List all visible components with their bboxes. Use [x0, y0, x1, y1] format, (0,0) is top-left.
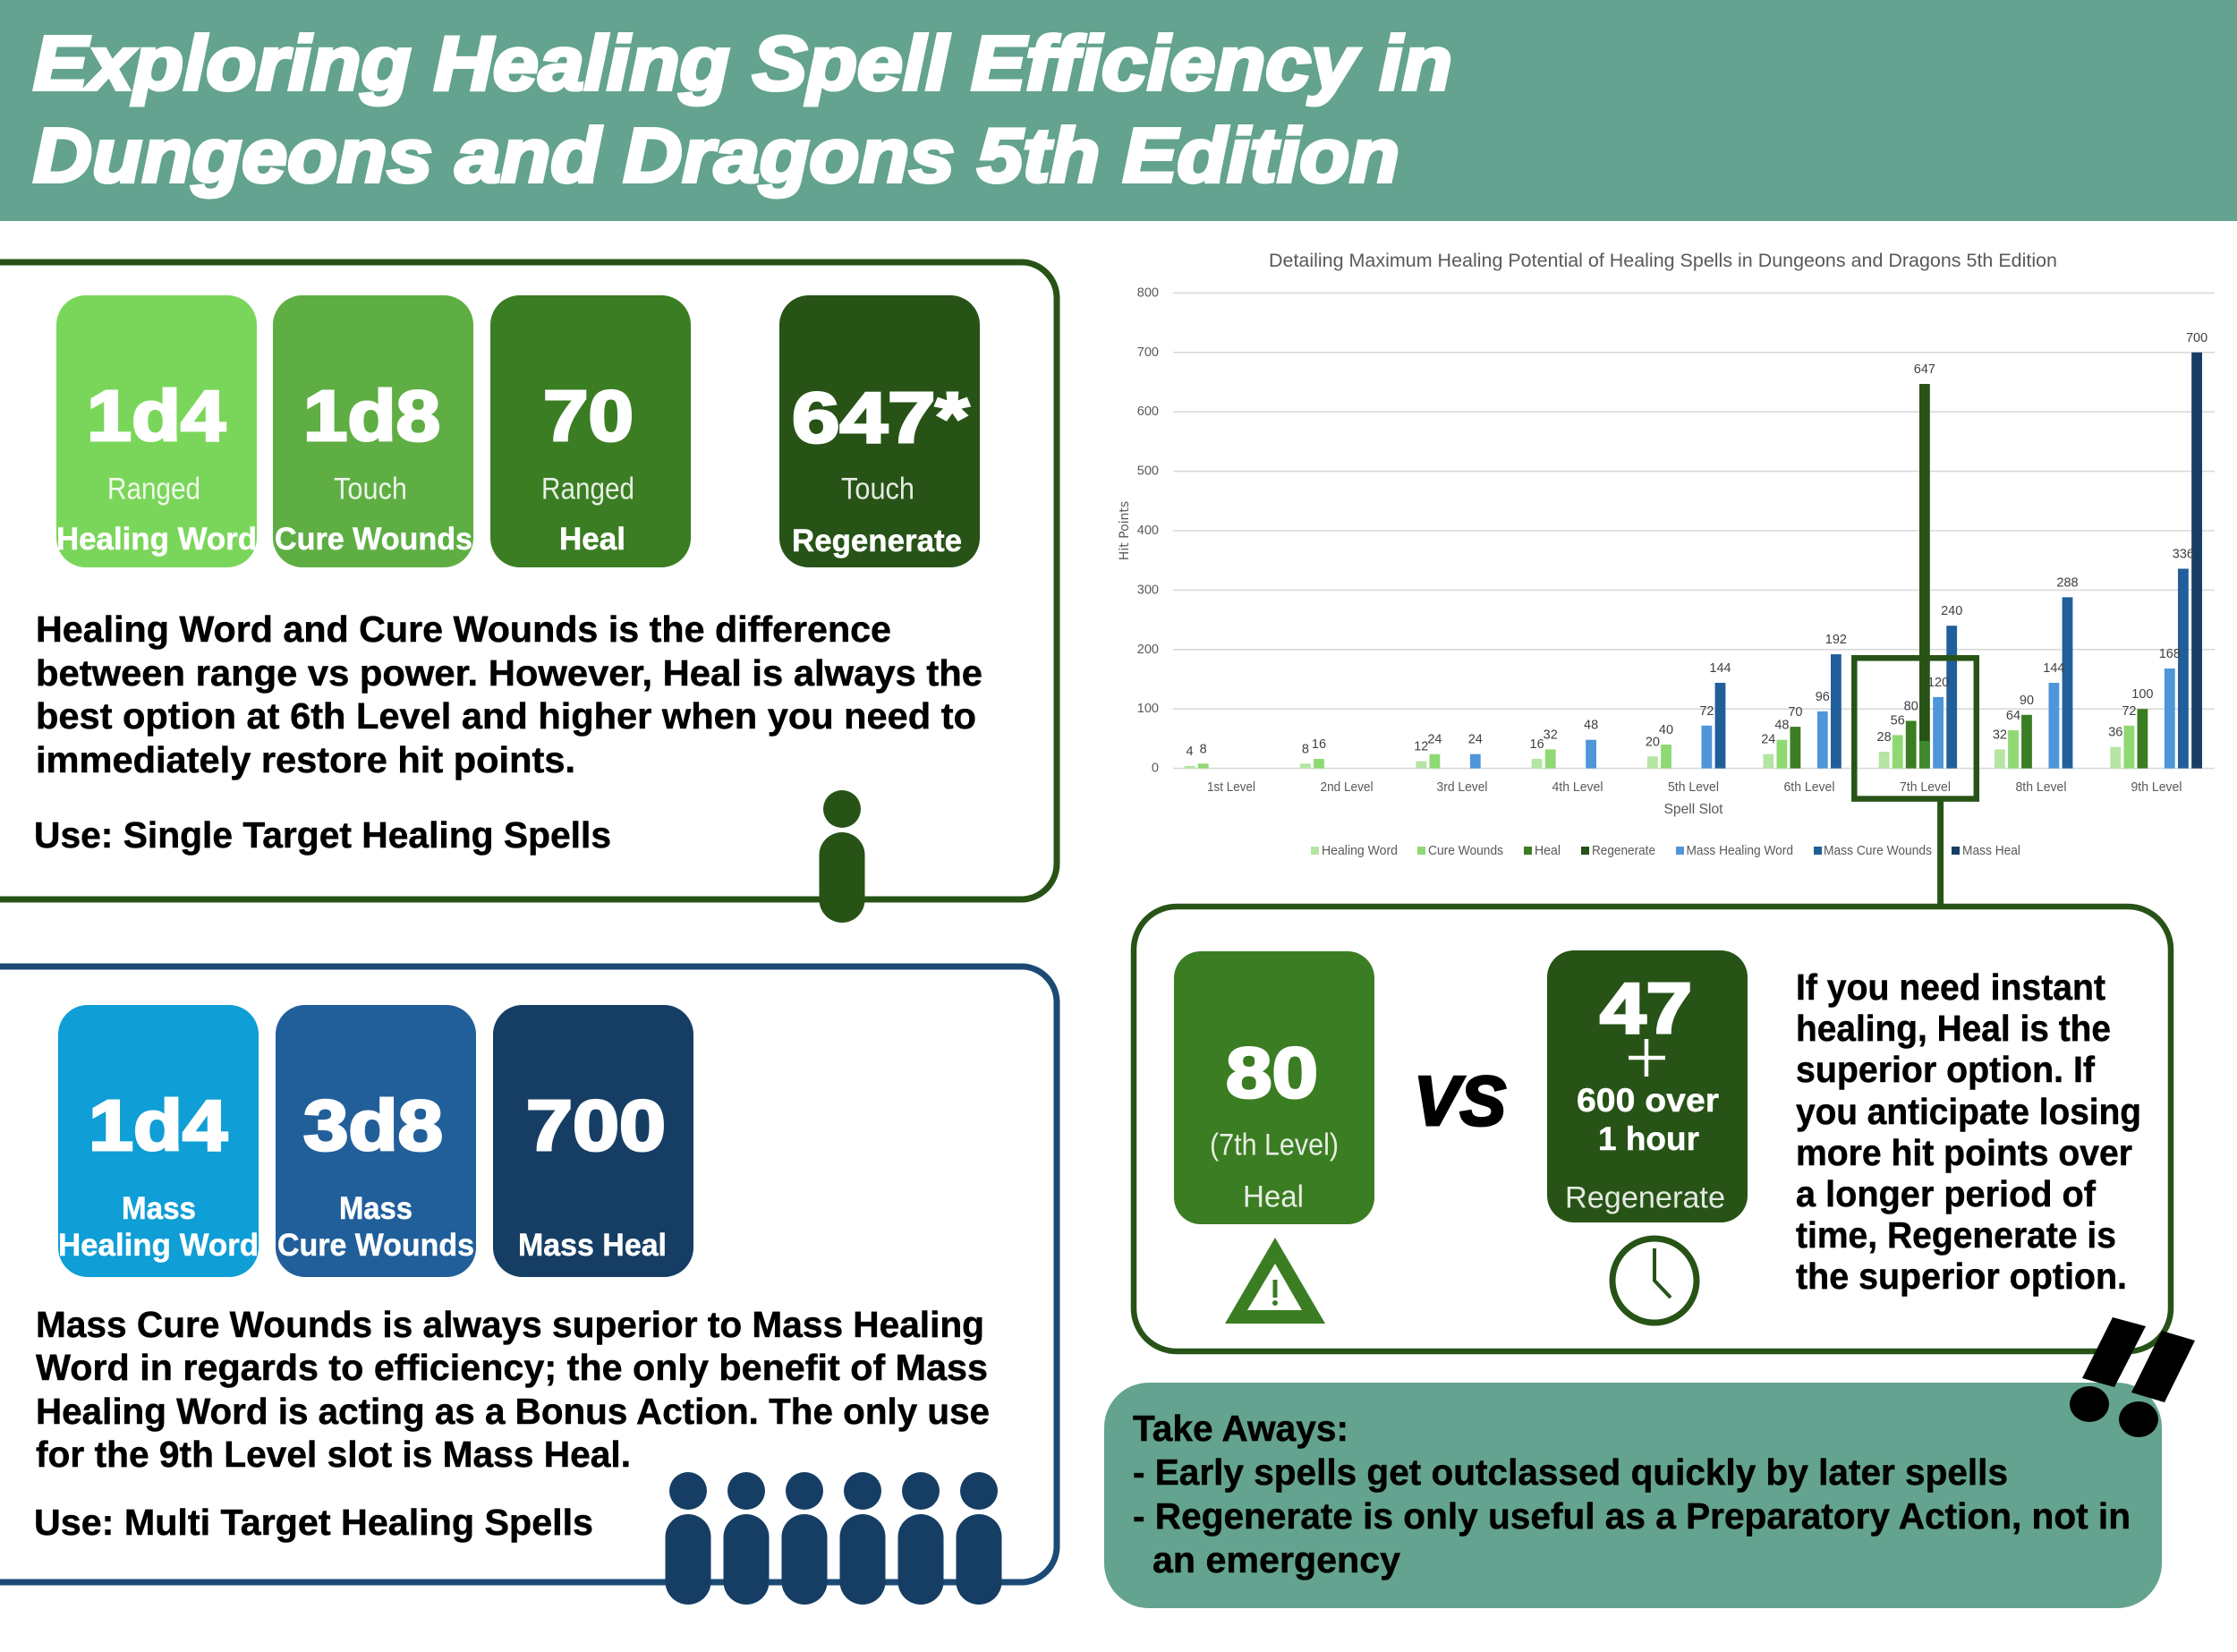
- use line: multi target: Use: Multi Target Healing Spells: [34, 1502, 593, 1543]
- legend: Heal: [1535, 844, 1561, 858]
- x axis labels: 4th Level: [1552, 779, 1603, 795]
- data labels: 12: [1414, 740, 1428, 754]
- icon: warning triangle: [1225, 1238, 1325, 1324]
- data labels: 20: [1646, 735, 1660, 749]
- y axis title: Hit Points: [1118, 501, 1132, 560]
- x axis labels: 9th Level: [2131, 779, 2182, 795]
- paragraph: multi target: Healing Word is acting as a Bonus Action. The only use: [36, 1391, 990, 1432]
- bars: Mass Healing Word: [1470, 668, 2175, 769]
- card: Cure Wounds: [273, 295, 473, 567]
- bars: Mass Cure Wounds: [1715, 569, 2189, 769]
- icon: single person: [820, 790, 864, 923]
- x axis title: Spell Slot: [1664, 802, 1723, 817]
- use line: single target: Use: Single Target Healing Spells: [34, 814, 611, 856]
- card: Regenerate over time: 600 over: [1577, 1082, 1719, 1119]
- take aways text: - Early spells get outclassed quickly by later spells: [1133, 1452, 2008, 1493]
- take aways text: Take Aways:: [1133, 1408, 1348, 1449]
- paragraph: comparison: you anticipate losing: [1796, 1091, 2141, 1132]
- data labels: 647: [1914, 362, 1935, 377]
- card: Healing Word: 1d4: [87, 376, 226, 456]
- y axis labels: 700: [1137, 345, 1159, 360]
- data labels: 56: [1891, 713, 1905, 728]
- data labels: 24: [1761, 733, 1775, 747]
- paragraph: comparison: more hit points over: [1796, 1132, 2132, 1173]
- data labels: 72: [2122, 704, 2136, 719]
- x axis labels: 1st Level: [1207, 779, 1255, 795]
- card: Mass Healing Word: 1d4: [89, 1086, 228, 1165]
- title: [33, 21, 1452, 199]
- paragraph: comparison: If you need instant: [1796, 967, 2105, 1008]
- paragraph: multi target: Word in regards to efficiency; the only benefit of Mass: [36, 1347, 988, 1388]
- y axis labels: 0: [1152, 762, 1159, 776]
- card: Cure Wounds: 1d8: [303, 376, 440, 456]
- x axis labels: 7th Level: [1900, 779, 1951, 795]
- data labels: 120: [1927, 676, 1949, 690]
- card: Heal at 7th level: [1174, 951, 1374, 1224]
- panel: single target healing spells: [0, 262, 1057, 923]
- data labels: 64: [2006, 709, 2020, 723]
- paragraph: single target: best option at 6th Level and higher when you need to: [36, 695, 976, 737]
- y axis labels: 600: [1137, 404, 1159, 419]
- take aways text: - Regenerate is only useful as a Preparatory Action, not in: [1133, 1495, 2131, 1537]
- versus label: VS: [1414, 1061, 1506, 1140]
- y axis labels: [1137, 285, 1159, 776]
- bar chart: maximum healing potential: [1118, 251, 2215, 858]
- legend: Cure Wounds: [1428, 844, 1503, 858]
- bar: Regenerate: [1919, 384, 1930, 769]
- data labels: 72: [1699, 704, 1714, 719]
- connector line: chart to comparison panel: [1937, 801, 1944, 907]
- paragraph: single target: Healing Word and Cure Wounds is the difference: [36, 609, 891, 650]
- paragraph: comparison: time, Regenerate is: [1796, 1214, 2116, 1256]
- highlight box: 7th level: [1854, 658, 1977, 799]
- legend: [1311, 844, 2020, 858]
- card: Regenerate: Touch: [841, 473, 914, 507]
- data labels: 32: [1993, 728, 2007, 742]
- card: Mass Cure Wounds: Cure Wounds: [277, 1228, 474, 1263]
- data labels: 16: [1530, 737, 1544, 752]
- data labels: 40: [1659, 723, 1673, 737]
- card: Mass Heal: Mass Heal: [518, 1228, 667, 1263]
- title: Exploring Healing Spell Efficiency in: [33, 21, 1452, 106]
- card: Mass Heal: [493, 1005, 693, 1277]
- take aways text: [1133, 1408, 2131, 1580]
- card: Heal: Heal: [559, 522, 625, 557]
- legend: Regenerate: [1592, 844, 1655, 858]
- data labels: 144: [2043, 661, 2065, 676]
- icon: clock: [1612, 1239, 1697, 1323]
- y axis labels: 500: [1137, 464, 1159, 479]
- card: Mass Healing Word: Mass: [122, 1191, 196, 1226]
- paragraph: multi target: for the 9th Level slot is Mass Heal.: [36, 1434, 631, 1475]
- data labels: 24: [1427, 733, 1442, 747]
- card: Cure Wounds: Cure Wounds: [275, 522, 472, 557]
- bars: Heal: [1790, 709, 2148, 769]
- card: Regenerate over time: 47: [1600, 968, 1692, 1048]
- data labels: 100: [2131, 687, 2154, 702]
- card: Regenerate: Regenerate: [792, 524, 962, 558]
- data labels: 96: [1816, 690, 1830, 704]
- data labels: 288: [2056, 575, 2079, 590]
- card: Heal: 70: [543, 376, 634, 456]
- card: Regenerate: [779, 295, 980, 567]
- bars: Healing Word: [1185, 747, 2121, 769]
- paragraph: comparison: healing, Heal is the: [1796, 1008, 2111, 1049]
- paragraph: single target: between range vs power. However, Heal is always the: [36, 652, 982, 694]
- paragraph: comparison: a longer period of: [1796, 1173, 2096, 1214]
- data labels: 192: [1825, 633, 1847, 647]
- panel: Heal vs Regenerate comparison: [1134, 907, 2171, 1351]
- card: Mass Healing Word: Healing Word: [58, 1228, 259, 1263]
- x axis labels: 2nd Level: [1321, 779, 1373, 795]
- data labels: 70: [1788, 705, 1802, 720]
- card: Healing Word: Healing Word: [56, 522, 257, 557]
- data labels: 80: [1904, 700, 1918, 714]
- card: Regenerate: 647*: [792, 378, 970, 457]
- card: Mass Healing Word: [58, 1005, 259, 1277]
- data labels: 48: [1584, 719, 1598, 733]
- y axis labels: 400: [1137, 524, 1159, 538]
- card: Healing Word: Ranged: [107, 473, 200, 507]
- paragraph: multi target: Mass Cure Wounds is always superior to Mass Healing: [36, 1304, 984, 1345]
- data labels: 168: [2159, 647, 2181, 661]
- x axis labels: 6th Level: [1784, 779, 1834, 795]
- card: Heal at 7th level: Heal: [1243, 1179, 1304, 1213]
- card: Regenerate over time: 1 hour: [1598, 1120, 1699, 1157]
- x axis labels: 8th Level: [2015, 779, 2067, 795]
- data labels: 48: [1774, 719, 1789, 733]
- legend: Mass Cure Wounds: [1824, 844, 1932, 858]
- data labels: 8: [1302, 742, 1309, 756]
- y axis labels: 200: [1137, 643, 1159, 657]
- data labels: 36: [2108, 726, 2122, 740]
- data labels: 144: [1709, 661, 1731, 676]
- data labels: 16: [1312, 737, 1326, 752]
- panel: multi target healing spells: [0, 967, 1057, 1605]
- data labels: 32: [1544, 728, 1558, 742]
- icon: group of six people: [666, 1472, 1002, 1605]
- card: Mass Cure Wounds: Mass: [339, 1191, 413, 1226]
- chart title: Detailing Maximum Healing Potential of Healing Spells in Dungeons and Dragons 5th Edition: [1269, 251, 2057, 271]
- paragraph: multi target: [36, 1304, 990, 1475]
- legend: Mass Heal: [1962, 844, 2020, 858]
- card: Heal at 7th level: (7th Level): [1210, 1128, 1339, 1162]
- header banner: [0, 0, 2237, 221]
- data labels: 28: [1877, 730, 1892, 745]
- panel: take aways: [1104, 1383, 2162, 1608]
- paragraph: single target: immediately restore hit points.: [36, 739, 575, 780]
- paragraph: single target: [36, 609, 982, 780]
- card: Heal: Ranged: [541, 473, 634, 507]
- x axis labels: [1207, 779, 2182, 795]
- data labels: [1187, 331, 2207, 759]
- take aways text: an emergency: [1153, 1539, 1400, 1580]
- y axis labels: 800: [1137, 285, 1159, 300]
- paragraph: comparison: [1796, 967, 2141, 1297]
- title: Dungeons and Dragons 5th Edition: [33, 114, 1399, 199]
- paragraph: comparison: superior option. If: [1796, 1049, 2095, 1090]
- card: Regenerate over time: Regenerate: [1565, 1181, 1725, 1215]
- x axis labels: 3rd Level: [1437, 779, 1487, 795]
- y axis labels: 100: [1137, 702, 1159, 716]
- card: Mass Cure Wounds: [276, 1005, 476, 1277]
- data labels: 4: [1187, 745, 1194, 759]
- data labels: 240: [1941, 604, 1962, 618]
- data labels: 700: [2186, 331, 2207, 345]
- legend: Healing Word: [1322, 844, 1398, 858]
- card: Healing Word: [56, 295, 257, 567]
- bars: Cure Wounds: [1198, 726, 2134, 769]
- y axis labels: 300: [1137, 583, 1159, 597]
- data labels: 24: [1468, 733, 1483, 747]
- card: Heal at 7th level: 80: [1226, 1033, 1318, 1112]
- card: Mass Cure Wounds: 3d8: [303, 1086, 443, 1165]
- data labels: 8: [1200, 742, 1207, 756]
- card: Heal: [490, 295, 691, 567]
- card: Cure Wounds: Touch: [334, 473, 407, 507]
- x axis labels: 5th Level: [1668, 779, 1719, 795]
- legend: Mass Healing Word: [1686, 844, 1793, 858]
- bar: Mass Heal: [2191, 353, 2202, 769]
- paragraph: comparison: the superior option.: [1796, 1256, 2127, 1297]
- data labels: 90: [2020, 694, 2034, 708]
- card: Regenerate over time: [1547, 950, 1748, 1222]
- card: Mass Heal: 700: [526, 1086, 666, 1165]
- icon: double exclamation marks: [2070, 1317, 2195, 1437]
- data labels: 336: [2173, 548, 2194, 562]
